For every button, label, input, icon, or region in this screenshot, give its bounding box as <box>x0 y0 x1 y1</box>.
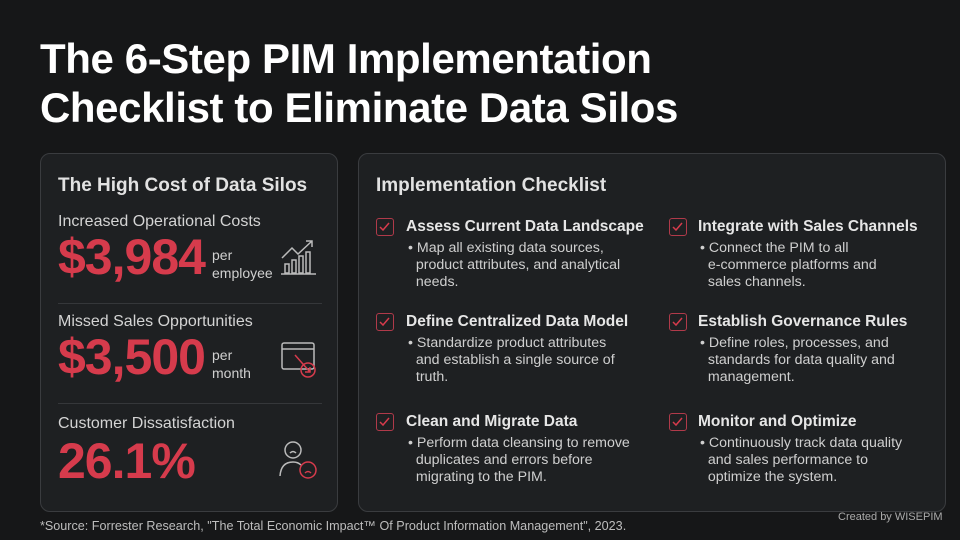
item 5: Establish Governance Rules <box>698 313 907 330</box>
panel: high cost of data silos <box>40 153 338 512</box>
heading: checklist: Implementation Checklist <box>376 175 606 196</box>
item 5 <box>669 313 907 385</box>
item 2: • Standardize product attributes <box>408 335 606 351</box>
stat: missed sales: month <box>212 365 251 381</box>
item 1 <box>376 218 644 290</box>
item 3: migrating to the PIM. <box>416 469 547 485</box>
stat: customer dissatisfaction <box>58 415 235 489</box>
stat: missed sales: $3,500 <box>58 329 205 385</box>
item 6: and sales performance to <box>708 452 868 468</box>
item 3: Clean and Migrate Data <box>406 413 577 430</box>
item 4: e-commerce platforms and <box>708 257 877 273</box>
item 3: duplicates and errors before <box>416 452 593 468</box>
item 4 <box>669 218 918 290</box>
item 3: • Perform data cleansing to remove <box>408 435 630 451</box>
stat: missed sales: Missed Sales Opportunities <box>58 313 253 330</box>
item 3 <box>376 413 630 485</box>
title <box>40 35 678 131</box>
item 1: • Map all existing data sources, <box>408 240 604 256</box>
item 4: • Connect the PIM to all <box>700 240 848 256</box>
stat: operational costs: $3,984 <box>58 229 205 285</box>
item 2: Define Centralized Data Model <box>406 313 628 330</box>
icon: sad user <box>279 441 317 479</box>
stat: operational costs <box>58 213 273 285</box>
stat: operational costs: Increased Operational Costs <box>58 213 261 230</box>
item 5: • Define roles, processes, and <box>700 335 889 351</box>
item 6: Monitor and Optimize <box>698 413 856 430</box>
item 1: Assess Current Data Landscape <box>406 218 644 235</box>
stat: customer dissatisfaction: 26.1% <box>58 433 195 489</box>
item 5: management. <box>708 369 795 385</box>
icon: browser down <box>281 342 316 378</box>
item 1: product attributes, and analytical <box>416 257 620 273</box>
item 6: optimize the system. <box>708 469 837 485</box>
item 2: truth. <box>416 369 448 385</box>
footnote: source: *Source: Forrester Research, "The Total Economic Impact™ Of Product Information Management", 2023. <box>40 519 626 533</box>
title: The 6-Step PIM Implementation <box>40 35 651 82</box>
item 4: sales channels. <box>708 274 806 290</box>
item 6 <box>669 413 902 485</box>
stat: operational costs: per <box>212 247 232 263</box>
stat: operational costs: employee <box>212 265 273 281</box>
item 2: and establish a single source of <box>416 352 615 368</box>
stat: customer dissatisfaction: Customer Dissatisfaction <box>58 415 235 432</box>
title: Checklist to Eliminate Data Silos <box>40 84 678 131</box>
heading: high cost: The High Cost of Data Silos <box>58 175 307 196</box>
item 6: • Continuously track data quality <box>700 435 902 451</box>
item 5: standards for data quality and <box>708 352 895 368</box>
panel: implementation checklist <box>358 153 946 512</box>
item 2 <box>376 313 628 385</box>
item 1: needs. <box>416 274 458 290</box>
item 4: Integrate with Sales Channels <box>698 218 918 235</box>
icon: chart up <box>281 240 316 275</box>
stat: missed sales <box>58 313 253 385</box>
stat: missed sales: per <box>212 347 232 363</box>
credit: Created by WISEPIM <box>838 511 943 523</box>
